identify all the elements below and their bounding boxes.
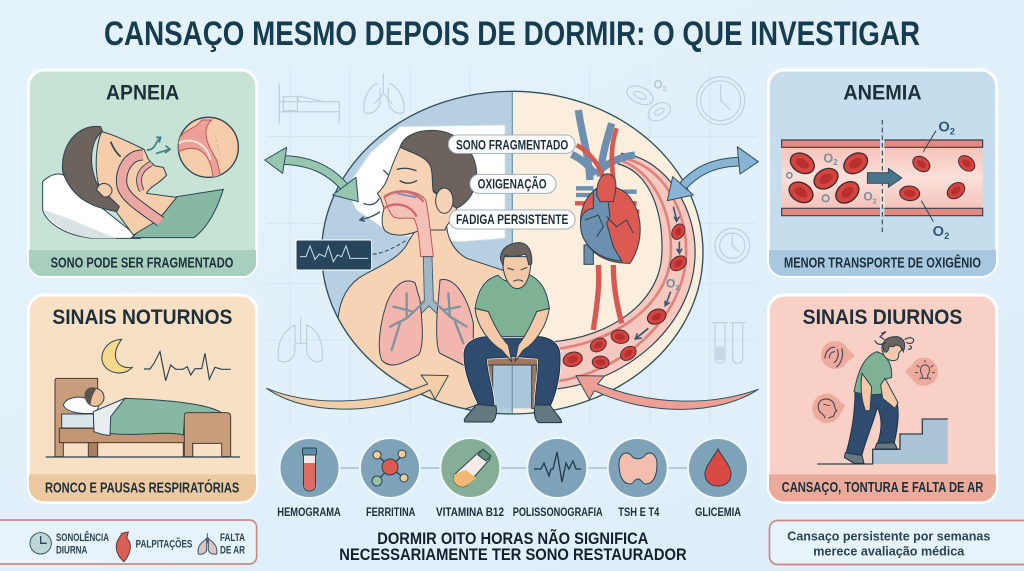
- callout: symptoms: DIURNA: [56, 544, 88, 556]
- exam: vitamina b12: VITAMINA B12: [436, 507, 504, 519]
- illustration: bed: [46, 378, 240, 457]
- anatomy circle: [310, 87, 712, 420]
- icon: ghost red cells and O2: [624, 82, 674, 125]
- icon: heart: [116, 532, 130, 562]
- bottom message: [339, 528, 687, 564]
- exam: hemograma: [277, 438, 341, 519]
- label: sono fragmentado: SONO FRAGMENTADO: [456, 137, 569, 152]
- icon: clock: [30, 533, 51, 554]
- seated patient: [464, 243, 562, 423]
- exam: tsh e t4: [608, 438, 668, 519]
- callout: medical advice: Cansaço persistente por semanas: [787, 530, 990, 544]
- vessels above and below heart: [593, 265, 622, 330]
- illustration: stairs: [817, 419, 948, 464]
- callout: medical advice: merece avaliação médica: [813, 544, 965, 558]
- bottom message: DORMIR OITO HORAS NÃO SIGNIFICA: [377, 528, 648, 548]
- illustration: tired man climbing: [844, 332, 914, 463]
- arrow: anemia link: [667, 147, 758, 201]
- pillow: [346, 125, 505, 242]
- panel: central illustration: O: [653, 77, 663, 91]
- oxygen vessel arc: [553, 153, 695, 389]
- icon: ghost lungs lower: [278, 317, 322, 362]
- arrow: apneia link: [265, 147, 358, 202]
- exams row: [277, 438, 748, 519]
- oxygen labels: 2: [944, 231, 949, 241]
- oxygen labels: O: [933, 224, 944, 240]
- callout: symptoms: PALPITAÇÕES: [136, 537, 192, 550]
- heading: APNEIA: [106, 80, 179, 104]
- exam: polissonografia: [513, 438, 603, 519]
- callout: symptoms: [0, 520, 257, 564]
- anatomy circle: O: [666, 276, 675, 290]
- red blood cells in vessel: [562, 222, 689, 369]
- oxygen labels: 2: [873, 196, 877, 205]
- chair: [493, 365, 532, 408]
- exam: ferritina: [360, 438, 420, 519]
- icon: ghost clock: [697, 77, 745, 125]
- legs: [464, 337, 560, 407]
- heading: SINAIS NOTURNOS: [52, 305, 232, 329]
- panel: sinais noturnos: [28, 295, 257, 502]
- callout: symptoms: SONOLÊNCIA: [56, 531, 109, 544]
- monitor: [296, 240, 407, 270]
- icon: lightbulb bubble: [905, 358, 938, 386]
- circle outline: [322, 91, 703, 414]
- heading: ANEMIA: [843, 80, 922, 104]
- arrow: reduced cells: [867, 168, 902, 187]
- breath strokes and arrow: [359, 170, 388, 221]
- callout: symptoms: FALTA: [220, 532, 245, 544]
- label: fadiga persistente: [449, 210, 575, 229]
- icon: ghost lungs: [364, 74, 404, 113]
- arrow: daytime signs link: [576, 376, 758, 409]
- red blood cells: [785, 149, 978, 208]
- shoes: [464, 404, 562, 423]
- exam: hemograma: HEMOGRAMA: [277, 507, 341, 519]
- oxygen labels: 2: [833, 158, 838, 167]
- heading: SINAIS DIURNOS: [803, 305, 962, 329]
- exam: polissonografia: POLISSONOGRAFIA: [513, 507, 603, 519]
- arrow: nocturnal signs link: [267, 375, 448, 409]
- shirt: [475, 273, 549, 337]
- icon: ear bubble: [821, 341, 855, 369]
- exam: glicemia: GLICEMIA: [695, 507, 741, 519]
- illustration: sleeping man: [43, 126, 223, 238]
- exam: ferritina: FERRITINA: [366, 507, 415, 519]
- panel: central illustration: [265, 65, 758, 425]
- panel: apneia: [28, 70, 257, 277]
- icon: ghost test tubes: [713, 323, 745, 363]
- heart: [575, 174, 640, 264]
- icon: ghost bed: [279, 84, 339, 123]
- panel: anemia: [768, 70, 997, 277]
- oxygen labels: 2: [950, 126, 955, 136]
- lungs: [379, 281, 422, 365]
- icon: breath arrows: [147, 137, 170, 153]
- icon: ghost small clock: [715, 228, 750, 263]
- patient body and neck: [338, 226, 506, 409]
- icon: breathing trace: [144, 352, 231, 381]
- icon: lungs: [198, 533, 217, 554]
- label: sono fragmentado: [448, 135, 575, 153]
- exam: glicemia: [688, 438, 748, 519]
- panel: central illustration: 2: [663, 84, 667, 93]
- head: [503, 257, 531, 289]
- icon: airway zoom circle: [178, 117, 238, 180]
- anatomy circle: 2: [675, 283, 679, 292]
- trachea: [420, 256, 438, 314]
- callout: symptoms: DE AR: [220, 544, 245, 556]
- icon: moon: [102, 339, 132, 373]
- exam: tsh e t4: TSH E T4: [618, 507, 660, 519]
- oxygen labels: O: [863, 190, 873, 204]
- label: oxigenação: [470, 174, 556, 193]
- patient hair: [400, 130, 477, 208]
- caption: RONCO E PAUSAS RESPIRATÓRIAS: [45, 478, 239, 496]
- panel: sinais diurnos: [768, 295, 997, 502]
- icon: head bubble: [812, 394, 845, 423]
- caption: SONO PODE SER FRAGMENTADO: [51, 256, 233, 272]
- label: oxigenação: OXIGENAÇÃO: [478, 177, 547, 192]
- blood vessel: [782, 120, 983, 235]
- oxygen labels: [787, 119, 955, 241]
- oxygen labels: O: [823, 151, 833, 165]
- arms and hands: [475, 308, 549, 362]
- label: fadiga persistente: FADIGA PERSISTENTE: [456, 212, 568, 227]
- bottom message: NECESSARIAMENTE TER SONO RESTAURADOR: [339, 545, 687, 564]
- airway: [384, 191, 433, 257]
- callout: medical advice: [770, 520, 1024, 564]
- patient face: [377, 147, 457, 235]
- oxygen labels: O: [938, 119, 950, 135]
- exam: vitamina b12: [436, 438, 504, 519]
